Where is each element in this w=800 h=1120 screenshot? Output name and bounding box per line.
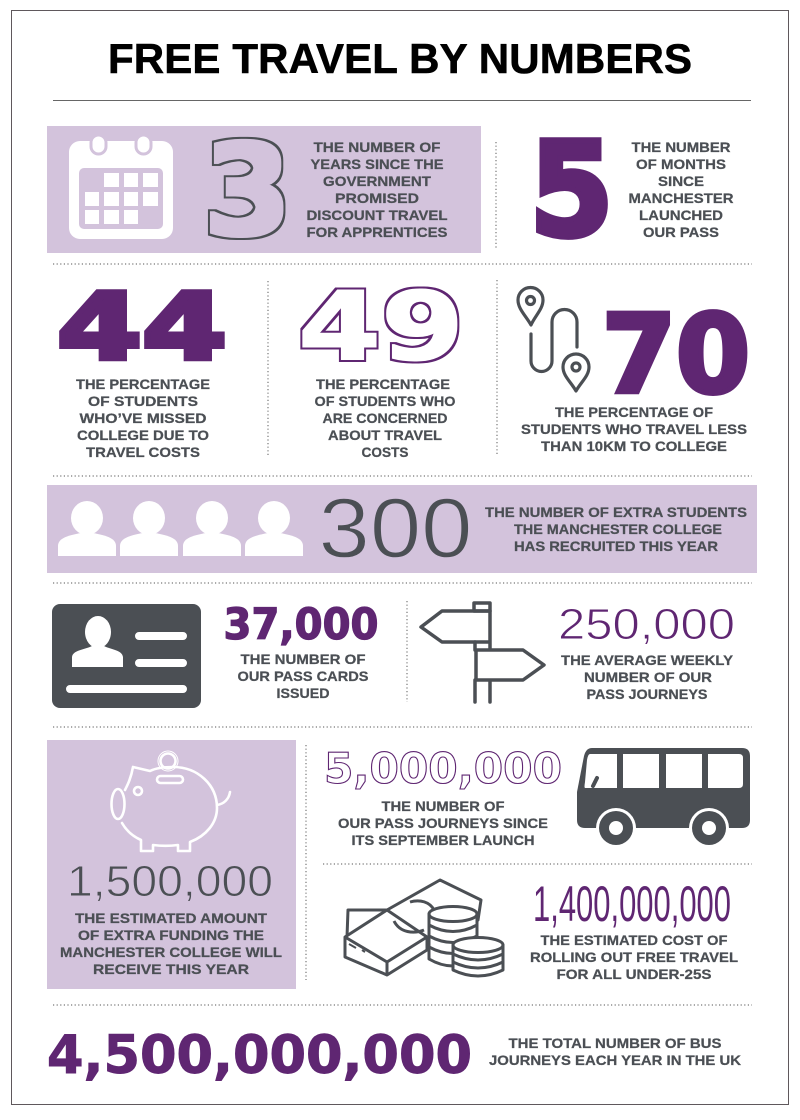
text: 37,000 description: THE NUMBER OF bbox=[240, 651, 366, 667]
text: 70 description bbox=[521, 404, 747, 454]
stat: 250,000 weekly journeys bbox=[421, 600, 735, 702]
text: 300 description: THE MANCHESTER COLLEGE bbox=[514, 521, 722, 537]
text: 44 description: COLLEGE DUE TO bbox=[77, 427, 209, 443]
text: 250,000 description: PASS JOURNEYS bbox=[586, 686, 708, 702]
icon: cash and coins bbox=[345, 880, 503, 976]
text: 1,400,000,000 description: ROLLING OUT FREE TRAVEL bbox=[530, 949, 738, 965]
number: 250,000: 250,000 bbox=[558, 600, 735, 649]
text: 5 description: LAUNCHED bbox=[639, 207, 723, 223]
stat: 5 months bbox=[530, 114, 734, 266]
text: 5 description: SINCE bbox=[658, 173, 704, 189]
stat: 44 percent bbox=[57, 274, 227, 460]
text: 3 description: FOR APPRENTICES bbox=[306, 224, 448, 240]
text: 1,500,000 description: THE ESTIMATED AMOUNT bbox=[75, 910, 267, 926]
text: 1,500,000 description bbox=[60, 910, 282, 977]
text: 44 description bbox=[76, 376, 210, 460]
text: 1,500,000 description: OF EXTRA FUNDING THE bbox=[78, 927, 264, 943]
text: 5,000,000 description: THE NUMBER OF bbox=[382, 798, 505, 814]
text: 44 description: TRAVEL COSTS bbox=[86, 444, 200, 460]
text: 1,400,000,000 description bbox=[530, 932, 738, 982]
number: 49: 49 bbox=[298, 273, 464, 382]
text: 1,400,000,000 description: THE ESTIMATED COST OF bbox=[540, 932, 728, 948]
number: 300: 300 bbox=[318, 481, 472, 575]
text: 3 description: YEARS SINCE THE bbox=[310, 156, 444, 172]
text: 300 description: THE NUMBER OF EXTRA STUDENTS bbox=[485, 504, 747, 520]
text: 5,000,000 description: ITS SEPTEMBER LAUNCH bbox=[352, 832, 534, 848]
text: 5 description: THE NUMBER bbox=[632, 139, 730, 155]
panel: 1,500,000 funding bbox=[47, 740, 296, 989]
icon: piggy bank bbox=[112, 751, 230, 851]
icon: ID card bbox=[52, 604, 201, 708]
stat: 49 percent bbox=[298, 273, 464, 460]
number: 44: 44 bbox=[57, 274, 227, 380]
text: 1,500,000 description: RECEIVE THIS YEAR bbox=[93, 961, 249, 977]
number: 37,000: 37,000 bbox=[224, 600, 378, 650]
text: 70 description: STUDENTS WHO TRAVEL LESS bbox=[521, 421, 747, 437]
text: 49 description bbox=[314, 376, 456, 460]
stat: 5,000,000 journeys bbox=[324, 744, 562, 848]
panel: 3 years bbox=[47, 117, 481, 264]
text: 44 description: OF STUDENTS bbox=[88, 393, 198, 409]
icon: four people bbox=[58, 501, 303, 556]
text: 3 description: DISCOUNT TRAVEL bbox=[306, 207, 448, 223]
number: 5: 5 bbox=[530, 114, 614, 266]
text: 5 description: MANCHESTER bbox=[628, 190, 734, 206]
text: 250,000 description: THE AVERAGE WEEKLY bbox=[561, 652, 734, 668]
text: 3 description: PROMISED bbox=[335, 190, 419, 206]
text: 300 description: HAS RECRUITED THIS YEAR bbox=[514, 538, 718, 554]
text: 49 description: COSTS bbox=[362, 444, 408, 460]
icon: signpost bbox=[421, 603, 544, 702]
text: 44 description: THE PERCENTAGE bbox=[76, 376, 210, 392]
text: 4,500,000,000 description: THE TOTAL NUMBER OF BUS bbox=[508, 1035, 722, 1051]
text: 250,000 description bbox=[561, 652, 734, 702]
number: 1,500,000: 1,500,000 bbox=[67, 857, 273, 906]
text: 49 description: OF STUDENTS WHO bbox=[314, 393, 456, 409]
text: 44 description: WHO’VE MISSED bbox=[80, 410, 206, 426]
stat: 70 percent bbox=[518, 288, 750, 454]
text: 250,000 description: NUMBER OF OUR bbox=[584, 669, 712, 685]
text: 4,500,000,000 description: JOURNEYS EACH YEAR IN THE UK bbox=[489, 1052, 741, 1068]
text: 5 description: OF MONTHS bbox=[636, 156, 726, 172]
text: 5,000,000 description: OUR PASS JOURNEYS SINCE bbox=[338, 815, 548, 831]
text: 37,000 description bbox=[238, 651, 368, 701]
icon: route with map pins bbox=[518, 288, 589, 391]
text: 4,500,000,000 description bbox=[489, 1035, 741, 1068]
text: 3 description: GOVERNMENT bbox=[323, 173, 431, 189]
panel: 300 extra students bbox=[47, 481, 757, 575]
number: 4,500,000,000: 4,500,000,000 bbox=[47, 1025, 472, 1086]
text: 1,400,000,000 description: FOR ALL UNDER-25S bbox=[556, 966, 712, 982]
icon: bus bbox=[577, 748, 750, 848]
text: 300 description bbox=[485, 504, 747, 554]
title: FREE TRAVEL BY NUMBERS bbox=[108, 35, 692, 82]
text: 5,000,000 description bbox=[338, 798, 548, 848]
icon: calendar bbox=[69, 135, 173, 239]
text: 37,000 description: OUR PASS CARDS bbox=[238, 668, 368, 684]
text: 1,500,000 description: MANCHESTER COLLEGE WILL bbox=[60, 944, 282, 960]
text: 49 description: ARE CONCERNED bbox=[322, 410, 448, 426]
text: 49 description: THE PERCENTAGE bbox=[316, 376, 450, 392]
number: 70: 70 bbox=[602, 293, 750, 418]
text: 5 description bbox=[628, 139, 734, 240]
number: 5,000,000: 5,000,000 bbox=[324, 744, 562, 793]
text: 70 description: THE PERCENTAGE OF bbox=[555, 404, 713, 420]
text: 3 description bbox=[306, 139, 448, 240]
number: 3: 3 bbox=[204, 117, 292, 264]
text: 37,000 description: ISSUED bbox=[276, 685, 330, 701]
stat: 1,400,000,000 cost bbox=[530, 876, 738, 982]
stat: 37,000 pass cards bbox=[52, 600, 378, 708]
text: 70 description: THAN 10KM TO COLLEGE bbox=[541, 438, 727, 454]
text: 5 description: OUR PASS bbox=[643, 224, 719, 240]
text: 49 description: ABOUT TRAVEL bbox=[328, 427, 442, 443]
stat: 4,500,000,000 bus journeys bbox=[47, 1025, 741, 1086]
text: 3 description: THE NUMBER OF bbox=[314, 139, 441, 155]
